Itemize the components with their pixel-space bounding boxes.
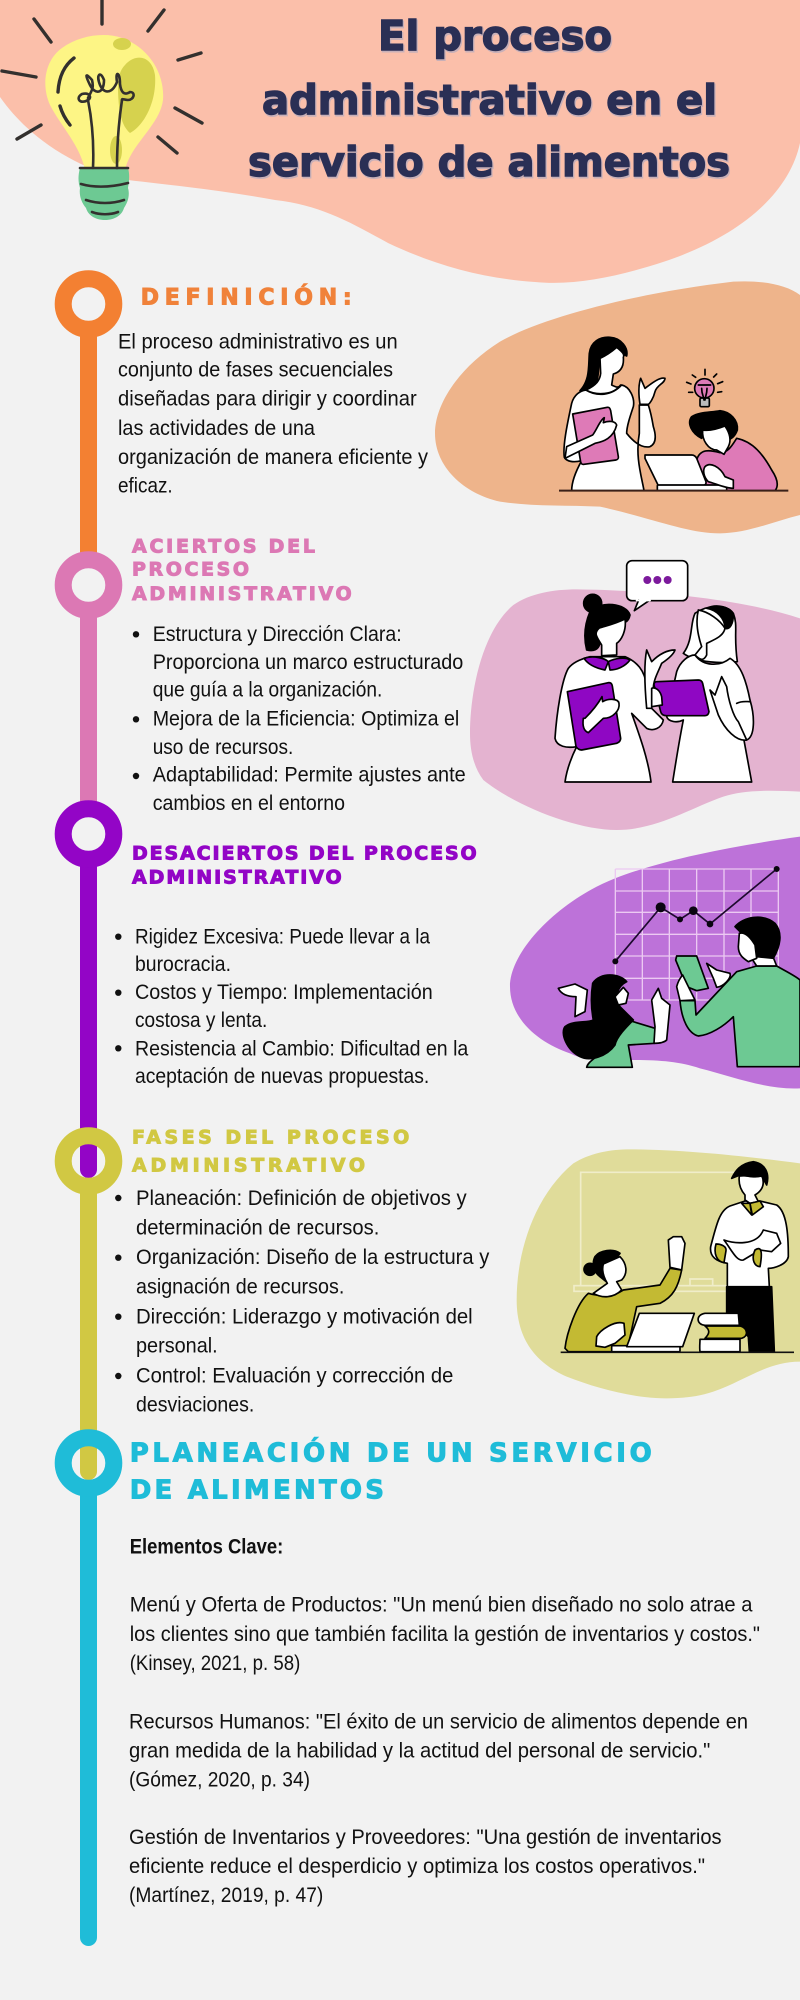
text: gestion de inventarios: [129, 1826, 722, 1907]
text: menu y oferta: (Kinsey, 2021, p. 58): [130, 1652, 300, 1675]
text: elementos clave: Elementos Clave:: [130, 1535, 283, 1558]
text: definicion: diseñadas para dirigir y coordinar: [118, 388, 417, 411]
list: aciertos: [133, 623, 466, 815]
list: desaciertos: Rigidez Excesiva: Puede llevar a la: [135, 925, 430, 948]
panel: fases illustration: [517, 1149, 800, 1398]
text: gestion de inventarios: Gestión de Inventarios y Proveedores: "Una gestión de inventarios: [129, 1826, 722, 1849]
text: definicion: las actividades de una: [118, 417, 315, 440]
list: aciertos: uso de recursos.: [153, 736, 293, 759]
heading: aciertos: ACIERTOS DEL: [132, 535, 315, 557]
heading: planeacion: DE ALIMENTOS: [130, 1476, 384, 1506]
list: aciertos: Proporciona un marco estructurado: [153, 651, 463, 674]
text: menu y oferta: los clientes sino que también facilita la gestión de inventarios y costos.": [130, 1623, 760, 1646]
list: desaciertos: Costos y Tiempo: Implementación: [135, 981, 433, 1004]
list: aciertos: Estructura y Dirección Clara:: [153, 623, 402, 646]
text: definicion: eficaz.: [118, 475, 173, 498]
list: fases: asignación de recursos.: [136, 1275, 344, 1298]
text: menu y oferta: [130, 1594, 760, 1675]
list: desaciertos: Resistencia al Cambio: Dificultad en la: [135, 1038, 469, 1061]
title: servicio de alimentos: [248, 138, 730, 186]
list: fases: [115, 1187, 490, 1417]
title: servicio de alimentos: [249, 140, 731, 188]
list: desaciertos: [115, 925, 469, 1088]
list: fases: Control: Evaluación y corrección de: [136, 1364, 453, 1387]
heading: fases: FASES DEL PROCESO: [132, 1126, 409, 1148]
list: fases: Dirección: Liderazgo y motivación del: [136, 1305, 473, 1328]
panel: desaciertos illustration: [510, 837, 800, 1088]
list: aciertos: Mejora de la Eficiencia: Optimiza el: [153, 708, 459, 731]
list: aciertos: cambios en el entorno: [153, 792, 345, 815]
list: aciertos: que guía a la organización.: [153, 679, 382, 702]
text: gestion de inventarios: (Martínez, 2019, p. 47): [129, 1884, 323, 1907]
heading: aciertos: ADMINISTRATIVO: [132, 583, 352, 605]
list: fases: determinación de recursos.: [136, 1216, 379, 1239]
heading: definicion: DEFINICIÓN:: [141, 284, 352, 310]
list: desaciertos: aceptación de nuevas propuestas.: [135, 1065, 429, 1088]
list: fases: desviaciones.: [136, 1394, 254, 1417]
list: fases: personal.: [136, 1335, 218, 1358]
list: fases: Organización: Diseño de la estructura y: [136, 1246, 490, 1269]
text: definicion: El proceso administrativo es un: [118, 330, 398, 353]
text: gestion de inventarios: eficiente reduce el desperdicio y optimiza los costos operativos.": [129, 1855, 705, 1878]
heading: desaciertos: DESACIERTOS DEL PROCESO: [132, 842, 477, 864]
heading: fases: [132, 1126, 409, 1177]
text: definicion: [118, 330, 428, 498]
list: fases: Planeación: Definición de objetivos y: [136, 1187, 467, 1210]
text: recursos humanos: gran medida de la habilidad y la actitud del personal de servicio.": [129, 1739, 710, 1762]
text: definicion: organización de manera eficiente y: [118, 446, 428, 469]
heading: planeacion: [130, 1437, 652, 1506]
heading: aciertos: PROCESO: [132, 559, 249, 581]
list: aciertos: Adaptabilidad: Permite ajustes ante: [153, 764, 466, 787]
list: desaciertos: costosa y lenta.: [135, 1009, 267, 1032]
icon: light bulb: [2, 0, 202, 220]
heading: aciertos: [132, 535, 352, 605]
heading: desaciertos: ADMINISTRATIVO: [132, 866, 342, 888]
text: menu y oferta: Menú y Oferta de Productos: "Un menú bien diseñado no solo atrae a: [130, 1594, 753, 1617]
title: administrativo en el: [262, 76, 717, 124]
panel: aciertos illustration: [470, 561, 800, 830]
text: definicion: conjunto de fases secuenciales: [118, 359, 393, 382]
title: El proceso: [378, 12, 612, 60]
header blob: [0, 0, 800, 283]
text: recursos humanos: [129, 1710, 748, 1792]
title: [248, 12, 731, 188]
heading: planeacion: PLANEACIÓN DE UN SERVICIO: [130, 1437, 652, 1469]
panel: definicion illustration: [435, 281, 800, 533]
timeline: vertical coloured line: [63, 279, 114, 1938]
text: recursos humanos: Recursos Humanos: "El éxito de un servicio de alimentos depende en: [129, 1710, 748, 1733]
text: recursos humanos: (Gómez, 2020, p. 34): [129, 1769, 310, 1792]
title: El proceso: [379, 14, 613, 62]
heading: desaciertos: [132, 842, 477, 888]
heading: fases: ADMINISTRATIVO: [132, 1155, 365, 1177]
list: desaciertos: burocracia.: [135, 953, 231, 976]
title: administrativo en el: [263, 78, 718, 126]
